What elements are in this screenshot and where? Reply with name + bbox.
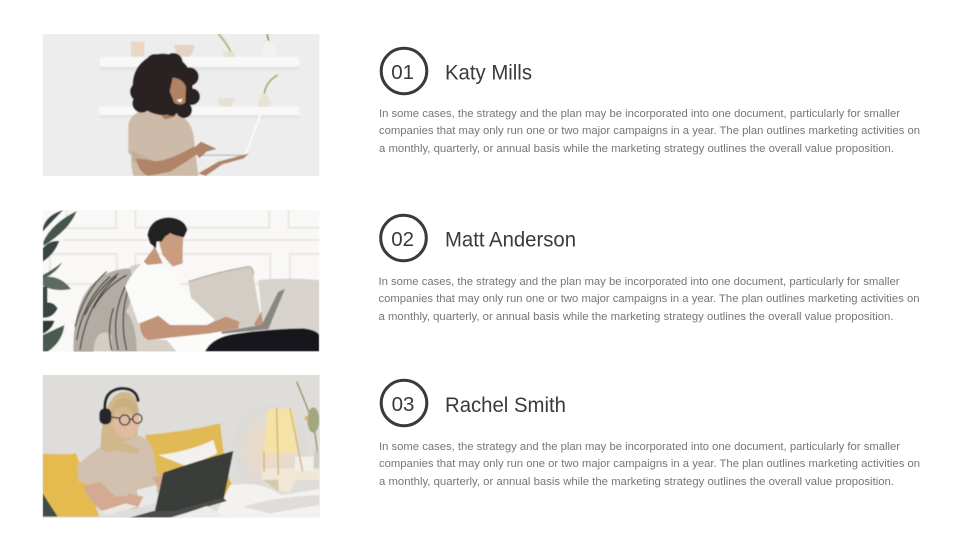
description text	[379, 108, 920, 155]
photo: man on sofa with laptop	[42, 210, 320, 352]
number badge 02: 02	[391, 228, 414, 251]
number badge 02	[381, 215, 426, 261]
photo: woman with laptop by shelves	[40, 32, 322, 178]
number badge 01	[381, 48, 427, 94]
name: Matt Anderson: Matt Anderson	[445, 228, 576, 252]
description text: In some cases, the strategy and the plan may be incorporated into one document, particularly for smaller	[378, 276, 900, 288]
panel: Matt Anderson	[42, 210, 919, 352]
description text: In some cases, the strategy and the plan may be incorporated into one document, particularly for smaller	[379, 441, 900, 453]
description text: companies that may only run one or two major campaigns in a year. The plan outlines marketing activities on	[379, 125, 920, 137]
number badge 03: 03	[392, 393, 414, 416]
number badge 01: 01	[391, 61, 414, 84]
description text: companies that may only run one or two major campaigns in a year. The plan outlines marketing activities on	[379, 458, 920, 470]
description text	[379, 441, 920, 488]
number badge 03	[381, 380, 427, 426]
description text	[378, 276, 920, 323]
description text: a monthly, quarterly, or annual basis while the marketing strategy outlines the overall value proposition.	[378, 311, 894, 323]
description text: a monthly, quarterly, or annual basis while the marketing strategy outlines the overall value proposition.	[379, 476, 894, 488]
name: Katy Mills: Katy Mills	[445, 62, 532, 84]
panel: Rachel Smith	[40, 372, 920, 520]
panel: Katy Mills	[40, 32, 920, 178]
name: Rachel Smith: Rachel Smith	[445, 394, 566, 417]
description text: companies that may only run one or two major campaigns in a year. The plan outlines marketing activities on	[378, 293, 920, 305]
description text: a monthly, quarterly, or annual basis while the marketing strategy outlines the overall value proposition.	[379, 143, 894, 155]
photo: woman with headphones on bed	[40, 372, 322, 520]
description text: In some cases, the strategy and the plan may be incorporated into one document, particularly for smaller	[379, 108, 900, 120]
